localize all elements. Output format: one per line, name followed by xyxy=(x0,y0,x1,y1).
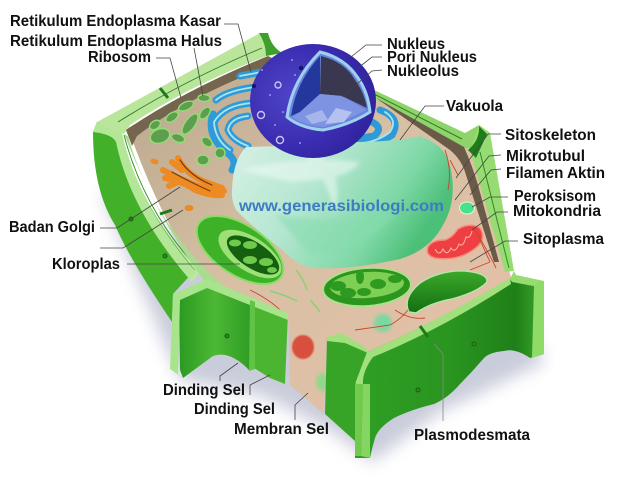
label: Mitokondria: Mitokondria xyxy=(513,203,601,220)
mitochondrion lower xyxy=(292,335,314,359)
label: Plasmodesmata: Plasmodesmata xyxy=(414,427,530,444)
smooth endoplasmic reticulum xyxy=(148,94,225,165)
thin membrane strands xyxy=(270,270,320,312)
label: Retikulum Endoplasma Halus: Retikulum Endoplasma Halus xyxy=(10,33,222,50)
label: Dinding Sel 2: Dinding Sel xyxy=(194,401,275,418)
panel: middle wall xyxy=(170,279,288,384)
label: Sitoskeleton: Sitoskeleton xyxy=(505,127,596,144)
leader lines xyxy=(100,24,518,421)
label: Pori Nukleus: Pori Nukleus xyxy=(387,49,477,66)
label: Retikulum Endoplasma Kasar: Retikulum Endoplasma Kasar xyxy=(10,13,221,30)
label: Membran Sel: Membran Sel xyxy=(234,421,329,438)
panel: left wall xyxy=(93,122,196,322)
golgi body xyxy=(153,158,224,195)
label: Filamen Aktin: Filamen Aktin xyxy=(506,165,605,182)
chloroplast 1 xyxy=(185,202,295,298)
nucleus xyxy=(250,44,376,158)
label: Vakuola: Vakuola xyxy=(446,98,503,115)
label: Nukleus: Nukleus xyxy=(387,36,445,53)
label: Nukleolus: Nukleolus xyxy=(387,63,459,80)
cell floor: cytoplasm xyxy=(128,58,512,414)
label: Sitoplasma: Sitoplasma xyxy=(523,231,604,248)
peroxisome xyxy=(460,202,474,214)
label: Dinding Sel 1: Dinding Sel xyxy=(163,382,245,399)
plasmodesma top xyxy=(160,88,168,98)
label: Mikrotubul: Mikrotubul xyxy=(506,148,585,165)
label: Badan Golgi: Badan Golgi xyxy=(9,219,95,236)
mitochondrion xyxy=(427,225,483,259)
panel: right wall xyxy=(355,271,544,458)
chloroplast 2 xyxy=(322,265,412,309)
plasmodesma xyxy=(160,210,172,214)
cytoskeleton filaments xyxy=(250,150,496,330)
label: Kloroplas: Kloroplas xyxy=(52,256,120,273)
panel: front wall xyxy=(325,333,368,441)
label: Ribosom: Ribosom xyxy=(88,49,151,66)
watermark: www.generasibiologi.com xyxy=(238,198,444,215)
nucleus cutaway xyxy=(287,52,370,130)
drop shadow xyxy=(100,190,545,462)
chloroplast 3 xyxy=(407,271,487,313)
peroxisome lower xyxy=(374,314,392,332)
rough endoplasmic reticulum xyxy=(211,72,395,170)
cell wall: back rim xyxy=(97,33,514,283)
vacuole xyxy=(232,136,453,268)
label: Peroksisom: Peroksisom xyxy=(514,188,596,205)
